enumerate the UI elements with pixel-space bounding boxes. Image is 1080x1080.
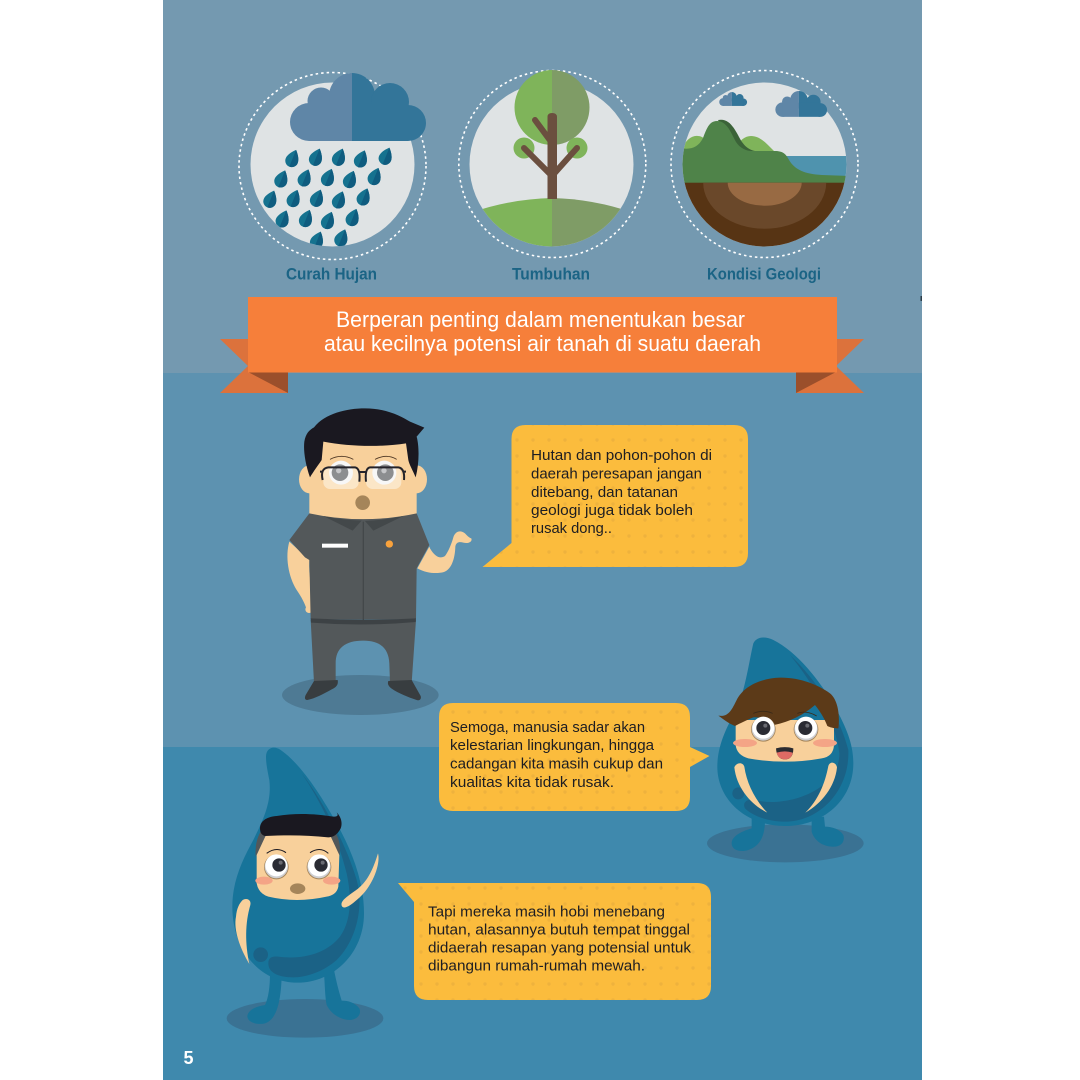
bubble text: Tapi mereka masih hobi menebang xyxy=(428,904,665,920)
speech bubble: right drop xyxy=(439,703,710,811)
bubble text: ditebang, dan tatanan xyxy=(531,485,678,501)
label: Curah Hujan: Curah Hujan xyxy=(286,264,377,284)
banner text: Berperan penting dalam menentukan besar xyxy=(336,307,745,332)
icon: geology xyxy=(671,70,858,258)
speech bubble: left drop xyxy=(398,883,711,1000)
character: man with glasses xyxy=(282,408,472,715)
icon: tree xyxy=(459,70,646,258)
bubble text: geologi juga tidak boleh xyxy=(531,503,693,519)
bubble text: kelestarian lingkungan, hingga xyxy=(450,738,655,754)
bubble text: didaerah resapan yang potensial untuk xyxy=(428,940,692,956)
bubble text: cadangan kita masih cukup dan xyxy=(450,756,663,772)
bubble text: dibangun rumah-rumah mewah. xyxy=(428,958,645,974)
page number: 5 xyxy=(184,1048,194,1068)
label: Kondisi Geologi: Kondisi Geologi xyxy=(707,264,821,284)
bubble text: Hutan dan pohon-pohon di xyxy=(531,448,712,464)
bubble text: hutan, alasannya butuh tempat tinggal xyxy=(428,922,690,938)
character: left water drop xyxy=(227,748,383,1038)
icon: rainfall xyxy=(239,72,426,260)
banner text: atau kecilnya potensi air tanah di suatu daerah xyxy=(324,331,761,356)
bubble text: rusak dong.. xyxy=(531,521,612,537)
page background bands xyxy=(163,0,922,1080)
label: Tumbuhan: Tumbuhan xyxy=(512,264,590,284)
bubble text: daerah peresapan jangan xyxy=(531,466,702,482)
character: right water drop xyxy=(707,638,864,862)
bubble text: kualitas kita tidak rusak. xyxy=(450,775,614,791)
bubble text: Semoga, manusia sadar akan xyxy=(450,720,645,736)
speech bubble: man xyxy=(482,425,748,567)
banner ribbon xyxy=(220,297,864,393)
